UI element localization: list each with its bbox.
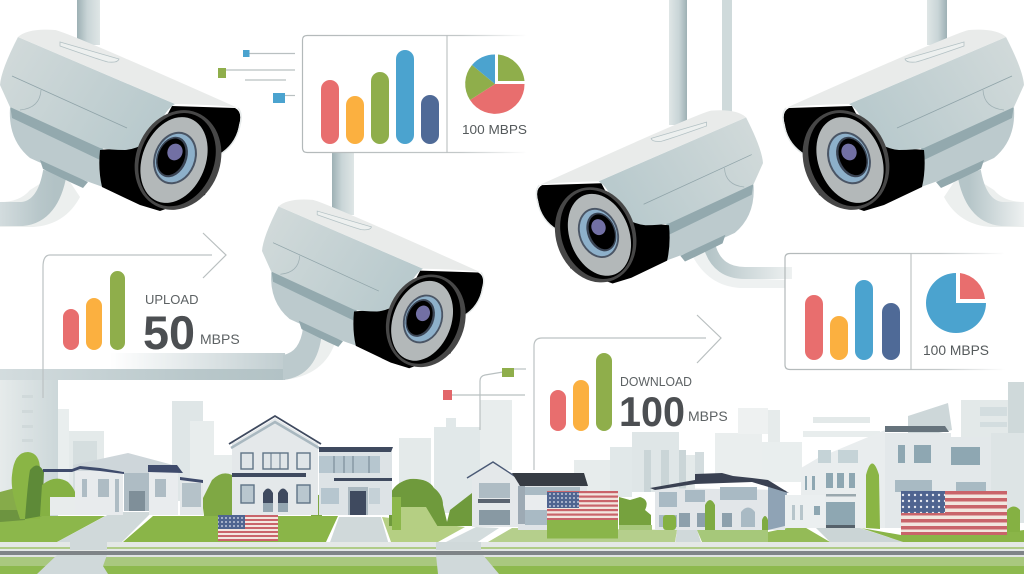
- upload value: 50: [143, 306, 195, 359]
- connector: bottom nodes: [443, 368, 526, 430]
- panel: download: [534, 315, 728, 470]
- camera 2: [262, 200, 484, 379]
- camera 3: [536, 110, 763, 295]
- bar chart: [805, 280, 900, 360]
- ground: [0, 512, 1024, 574]
- upload value: [143, 292, 240, 359]
- pie chart: [926, 273, 986, 333]
- download value: DOWNLOAD: [620, 375, 692, 389]
- arrow: [697, 315, 721, 363]
- bars: [550, 353, 612, 431]
- arrow: [203, 233, 226, 278]
- panel: right chart: [785, 254, 1005, 370]
- label: 100 MBPS: [462, 122, 527, 137]
- pie chart: [465, 54, 525, 114]
- house 3: [467, 462, 588, 530]
- panel: upload: [43, 233, 240, 398]
- download value: 100: [619, 388, 685, 435]
- panel: top chart: [302, 36, 527, 152]
- download value: MBPS: [688, 408, 728, 424]
- camera 4: [783, 30, 1024, 223]
- upload value: UPLOAD: [145, 292, 198, 307]
- upload value: MBPS: [200, 331, 240, 347]
- skyline: [0, 380, 1024, 523]
- bars: [63, 271, 125, 350]
- flag 1: [218, 515, 278, 541]
- label: 100 MBPS: [923, 343, 989, 358]
- flag 3: [901, 491, 1007, 535]
- pipes and poles: [0, 0, 1024, 380]
- flag 2: [547, 491, 618, 538]
- trees: [0, 452, 1020, 532]
- house 1: [43, 453, 203, 515]
- connector lines and nodes: top: [218, 50, 295, 103]
- house 5: [785, 426, 991, 529]
- camera 1: [0, 30, 241, 223]
- house 4: [650, 473, 789, 530]
- download value: [619, 375, 728, 435]
- house 2: [229, 416, 393, 515]
- bar chart: [321, 50, 439, 144]
